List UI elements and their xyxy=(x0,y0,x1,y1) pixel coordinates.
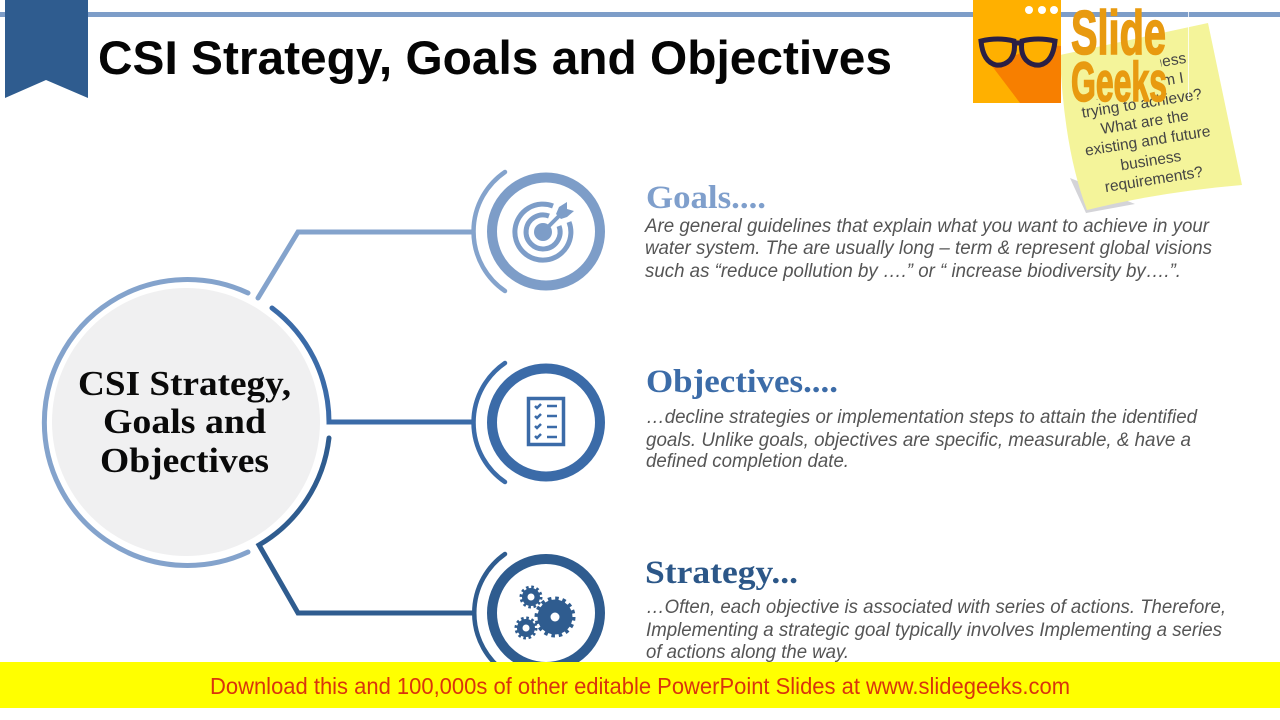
logo wordmark: Slide xyxy=(1071,0,1166,68)
center label: Objectives xyxy=(100,441,269,480)
title: CSI Strategy, Goals and Objectives xyxy=(98,31,892,84)
text block: objectives xyxy=(646,364,1198,472)
top rule xyxy=(0,12,1280,17)
center label: Goals and xyxy=(103,402,267,441)
sticky note text xyxy=(1072,48,1218,198)
sticky note text: What business xyxy=(1084,50,1188,83)
body: objectives: …decline strategies or implementation steps to attain the identified xyxy=(646,407,1198,428)
sticky note text: requirements? xyxy=(1104,164,1204,196)
sticky note text: existing and future xyxy=(1084,123,1212,160)
node: goals xyxy=(474,172,600,291)
connector: goals xyxy=(44,232,473,566)
body: strategy: …Often, each objective is associated with series of actions. Therefore, xyxy=(646,597,1226,618)
body: goals: water system. The are usually long – term & represent global visions xyxy=(645,238,1212,259)
ribbon bookmark xyxy=(5,0,88,98)
body: goals: such as “reduce pollution by ….” or “ increase biodiversity by….”. xyxy=(645,261,1181,282)
heading: strategy: Strategy... xyxy=(645,555,798,591)
logo: Slide Geeks xyxy=(973,0,1167,113)
central circle xyxy=(52,288,320,556)
sticky note text: problem am I xyxy=(1093,70,1185,101)
connector: strategy xyxy=(259,438,473,613)
body: objectives: goals. Unlike goals, objectives are specific, measurable, & have a xyxy=(646,430,1191,451)
body: objectives: defined completion date. xyxy=(646,451,849,472)
body: goals xyxy=(644,216,1212,282)
heading: objectives: Objectives.... xyxy=(646,364,838,400)
text block: strategy xyxy=(645,555,1226,663)
node: objectives xyxy=(474,363,600,482)
logo wordmark xyxy=(1071,0,1167,113)
body: goals: Are general guidelines that explain what you want to achieve in your xyxy=(644,216,1210,237)
node: strategy xyxy=(474,554,600,672)
sticky note text: trying to achieve? xyxy=(1080,86,1204,122)
body: strategy: Implementing a strategic goal typically involves Implementing a series xyxy=(646,620,1222,641)
download banner xyxy=(0,662,1280,708)
icon: gears xyxy=(516,587,574,638)
sticky note text: business xyxy=(1119,148,1183,174)
logo wordmark: Geeks xyxy=(1071,50,1167,113)
text block: goals xyxy=(644,180,1212,282)
icon: glasses xyxy=(981,39,1055,65)
sticky note text: What are the xyxy=(1100,107,1190,138)
body: strategy xyxy=(646,597,1226,663)
icon: target xyxy=(515,202,574,260)
center label: CSI Strategy, xyxy=(78,364,291,403)
banner text: Download this and 100,000s of other editable PowerPoint Slides at www.slidegeeks.com xyxy=(210,673,1070,699)
body: strategy: of actions along the way. xyxy=(646,642,849,663)
sticky note xyxy=(1060,0,1242,213)
center label xyxy=(78,364,291,480)
body: objectives xyxy=(646,407,1198,472)
icon: checklist xyxy=(528,398,564,444)
heading: goals: Goals.... xyxy=(646,180,766,216)
connector: objectives xyxy=(272,308,473,422)
